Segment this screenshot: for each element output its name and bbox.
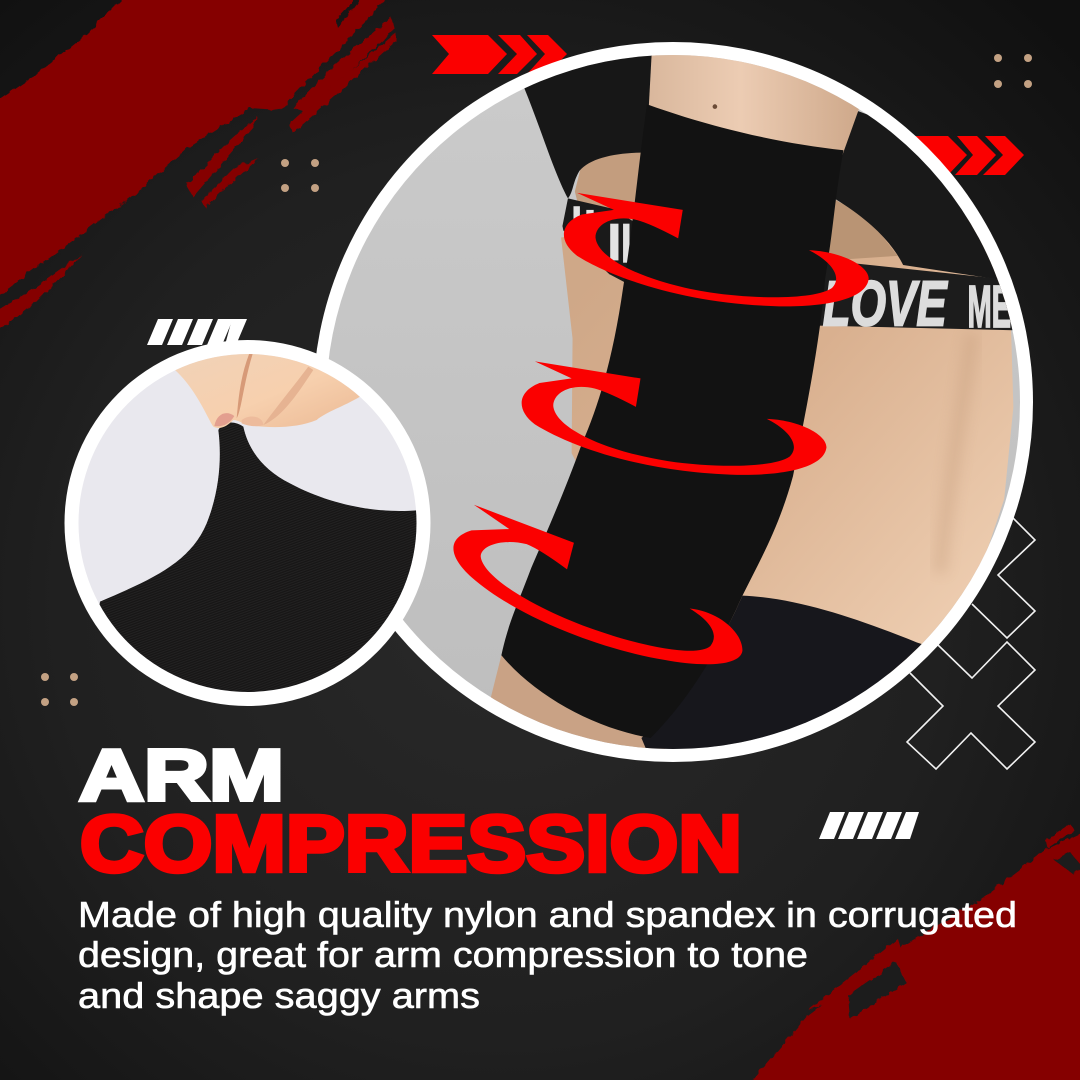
description text — [78, 894, 1017, 1016]
stripes: upper left — [147, 319, 247, 345]
small photo circle: stretching the fabric — [60, 340, 440, 710]
decorative dots: bottom left — [41, 673, 78, 706]
outlined X lattice — [907, 518, 1035, 769]
red brush stroke: bottom right — [743, 824, 1080, 1080]
title: COMPRESSION: COMPRESSION — [80, 799, 742, 888]
description text: design, great for arm compression to tone — [78, 934, 808, 975]
decorative dots: top right — [994, 54, 1032, 88]
large photo circle: arm with compression sleeve: ME — [967, 273, 1011, 340]
chevron arrows: right — [905, 136, 1024, 175]
large photo circle: arm with compression sleeve: LOVE — [823, 268, 948, 340]
large photo circle: arm with compression sleeve — [300, 30, 1060, 780]
description text: and shape saggy arms — [78, 975, 480, 1016]
compression swirl arrows — [453, 193, 869, 664]
stripes: lower right — [819, 812, 919, 839]
description text: Made of high quality nylon and spandex in corrugated — [78, 894, 1017, 935]
chevron arrows: top — [432, 35, 567, 74]
title: ARM: ARM — [79, 736, 284, 816]
red brush stroke: top left — [0, 0, 396, 336]
decorative dots: top left — [281, 159, 319, 192]
